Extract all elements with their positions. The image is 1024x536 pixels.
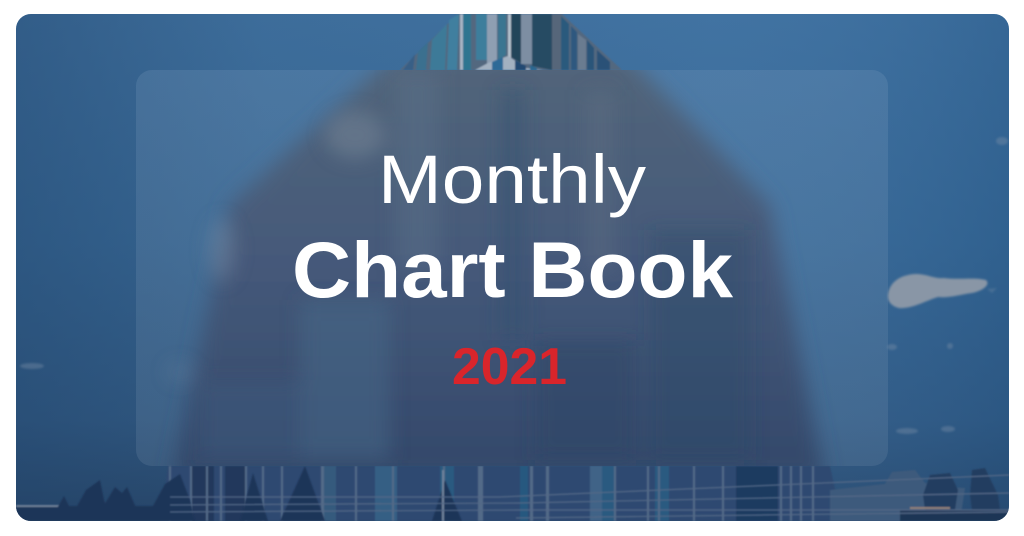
blurred facade details [206, 92, 746, 460]
title line: Chart Book: Chart Book [292, 225, 734, 314]
small distant clouds [20, 137, 1008, 434]
trees and skyline on the left [16, 466, 462, 521]
blurred building [172, 50, 825, 480]
building base below the panel [160, 466, 842, 521]
frosted glass panel [136, 50, 888, 480]
titles [295, 153, 733, 384]
railings and trees on the right [170, 468, 1009, 521]
title line: Monthly: Monthly [378, 141, 647, 218]
building top above the panel [400, 14, 622, 70]
year: 2021 [452, 338, 567, 396]
cloud [888, 274, 997, 308]
panel tint [136, 70, 888, 466]
